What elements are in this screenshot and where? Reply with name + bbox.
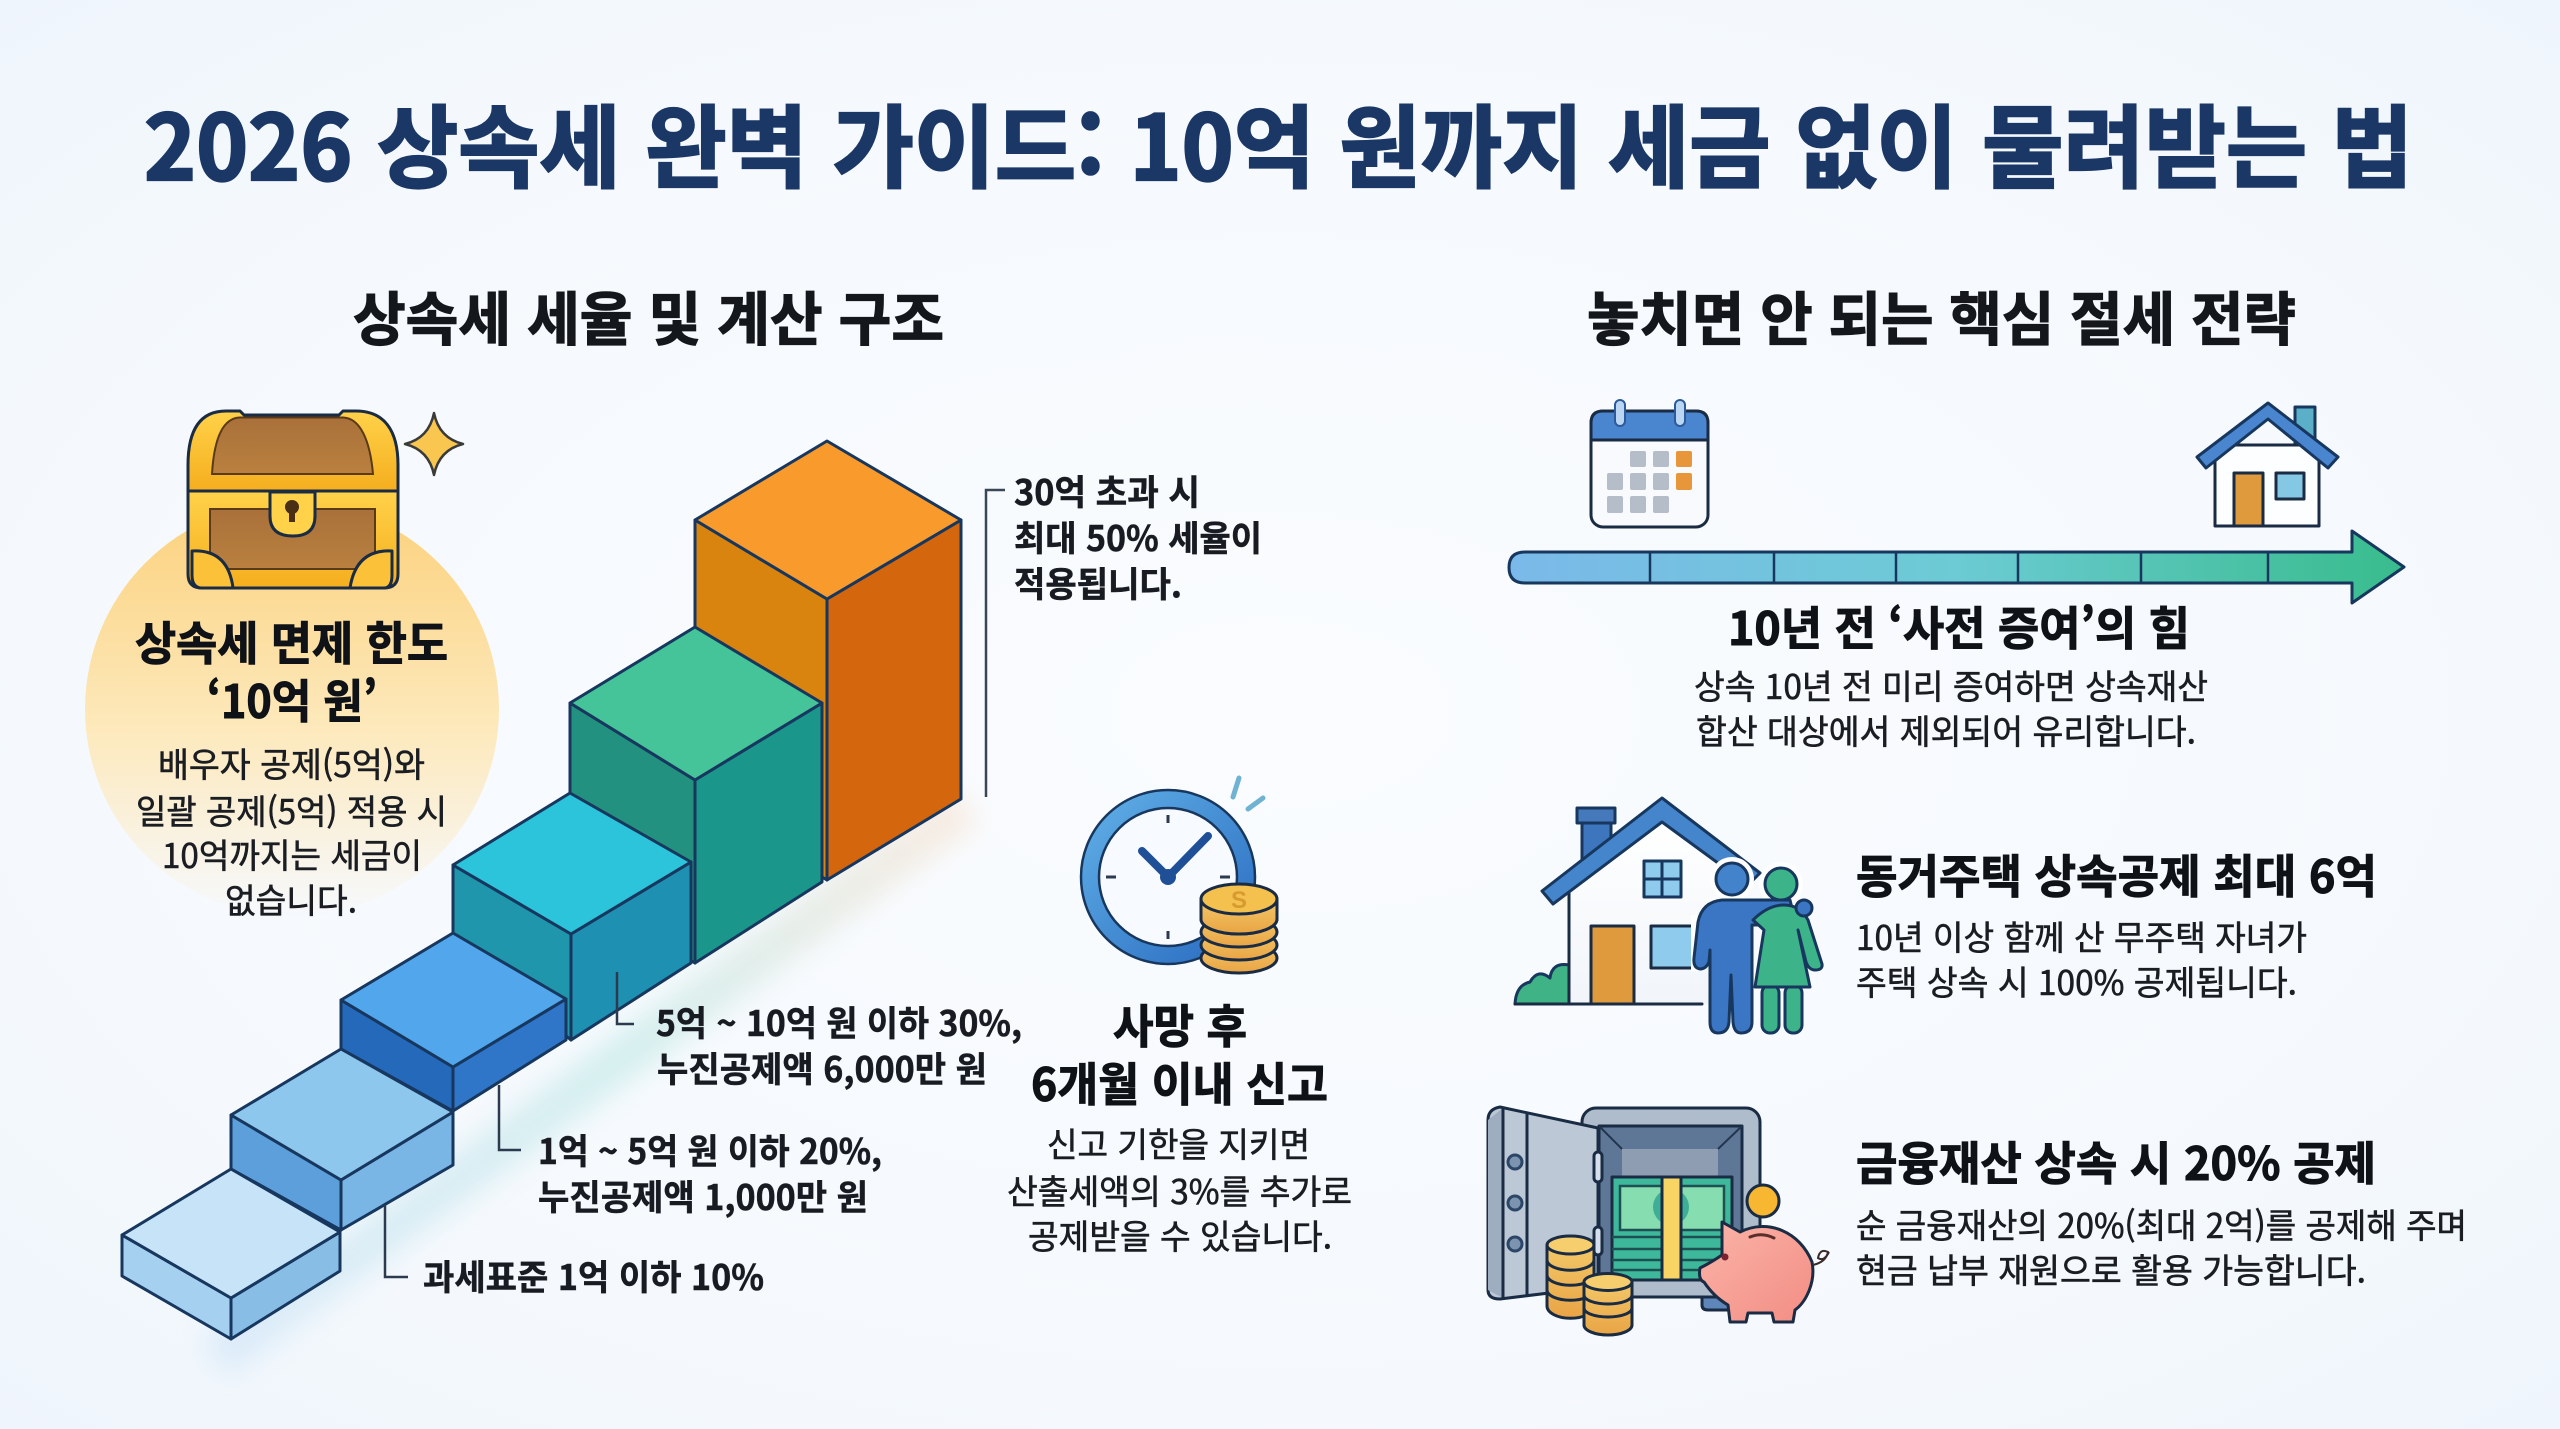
title: 2026 상속세 완벽 가이드: 10억 원까지 세금 없이 물려받는 법: [144, 76, 2413, 206]
heading: tax rate structure: 상속세 세율 및 계산 구조: [353, 273, 944, 357]
icon: house with family: [1515, 798, 1822, 1033]
label: 1억~5억: 1억 ~ 5억 원 이하 20%,: [538, 1124, 882, 1175]
cohabitation body text: 10년 이상 함께 산 무주택 자녀가: [1856, 911, 2307, 960]
financial body text: 순 금융재산의 20%(최대 2억)를 공제해 주며: [1856, 1199, 2467, 1248]
label: 30억 초과: 30억 초과 시: [1014, 465, 1200, 516]
label: 30억 초과: [986, 465, 1262, 797]
icon: clock with coins: S: [1231, 887, 1247, 914]
heading: key tax saving strategies: 놓치면 안 되는 핵심 절세 전략: [1587, 273, 2296, 357]
label: 5억~10억: 5억 ~ 10억 원 이하 30%,: [656, 996, 1022, 1047]
pre-gift body text: 합산 대상에서 제외되어 유리합니다.: [1696, 705, 2196, 754]
cohabitation body text: [1856, 911, 2307, 1005]
icon: safe, coins and piggy bank: [1488, 1107, 1829, 1335]
filing heading: [1031, 991, 1328, 1115]
staircase chart: [122, 441, 965, 1358]
exemption body text: 10억까지는 세금이: [162, 829, 422, 878]
financial body text: 현금 납부 재원으로 활용 가능합니다.: [1856, 1244, 2366, 1293]
exemption body text: [136, 738, 447, 923]
label: 1억 이하: [385, 1205, 764, 1301]
pre-gift body text: 상속 10년 전 미리 증여하면 상속재산: [1694, 660, 2208, 709]
icon: house: [2197, 403, 2338, 526]
panel: six month filing: [1007, 778, 1352, 1259]
label: 30억 초과: 적용됩니다.: [1014, 557, 1182, 608]
exemption heading: 상속세 면제 한도: [135, 608, 448, 674]
label: 1억 이하: 과세표준 1억 이하 10%: [423, 1250, 764, 1301]
exemption body text: 일괄 공제(5억) 적용 시: [136, 785, 447, 834]
step: 5억~10억 30%: [453, 793, 691, 1040]
filing body text: [1007, 1118, 1352, 1259]
arrow: timeline: [1509, 531, 2404, 603]
exemption heading: [135, 608, 448, 732]
filing heading: 사망 후: [1113, 991, 1247, 1057]
label: 5억~10억: [617, 972, 1022, 1093]
exemption body text: 배우자 공제(5억)와: [158, 738, 425, 787]
figure: woman: [1753, 868, 1822, 1033]
exemption heading: ‘10억 원’: [207, 666, 377, 732]
filing body text: 공제받을 수 있습니다.: [1028, 1210, 1332, 1259]
exemption body text: 없습니다.: [225, 874, 357, 923]
filing body text: 산출세액의 3%를 추가로: [1007, 1165, 1352, 1214]
filing body text: 신고 기한을 지키면: [1047, 1118, 1310, 1167]
icon: sparkle: [405, 413, 463, 475]
figure: man: [1694, 863, 1796, 1033]
step: 30억 초과 50%: [695, 441, 961, 880]
step: 1억~5억 20%: [341, 933, 566, 1111]
icon: calendar: [1591, 400, 1708, 527]
glow circle: [85, 502, 499, 916]
panel: pre-gift timeline: [1509, 400, 2404, 754]
label: 1억~5억: [499, 1085, 882, 1221]
step: 10억~30억: [570, 627, 822, 963]
financial body text: [1856, 1199, 2467, 1293]
cohabitation heading: 동거주택 상속공제 최대 6억: [1856, 841, 2377, 907]
icon: treasure chest: [188, 411, 398, 588]
financial heading: 금융재산 상속 시 20% 공제: [1856, 1128, 2376, 1194]
panel: cohabitation house deduction: [1515, 798, 2377, 1033]
pre-gift body text: [1694, 660, 2208, 754]
label: 1억~5억: 누진공제액 1,000만 원: [538, 1170, 868, 1221]
filing heading: 6개월 이내 신고: [1031, 1049, 1328, 1115]
step: 1억 이하 10%: [122, 1169, 340, 1339]
label: 5억~10억: 누진공제액 6,000만 원: [657, 1042, 987, 1093]
panel: financial assets deduction: [1488, 1107, 2467, 1335]
step: second lower: [231, 1049, 453, 1230]
panel: exemption limit: [85, 411, 499, 923]
label: 30억 초과: 최대 50% 세율이: [1014, 511, 1262, 562]
pre-gift heading: 10년 전 ‘사전 증여’의 힘: [1728, 593, 2190, 659]
icon: clock with coins: [1081, 778, 1277, 973]
cohabitation body text: 주택 상속 시 100% 공제됩니다.: [1856, 956, 2297, 1005]
